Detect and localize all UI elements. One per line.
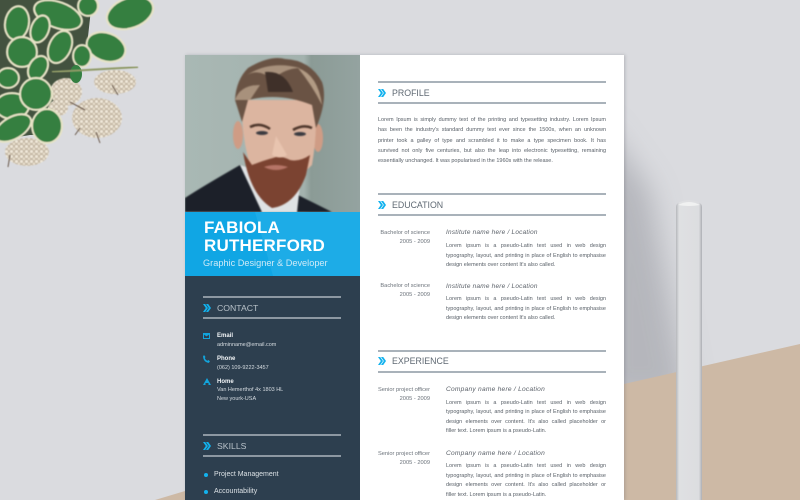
skill: project management: Project Management [214,471,279,478]
experience entry 2 title: Company name here / Location [446,450,545,457]
education top rule [378,193,606,195]
email label: Email [217,333,233,339]
profile text [378,117,606,164]
beard [243,152,310,208]
profile text: printer took a galley of type and scrambled it to make a type specimen book. It has [378,138,606,144]
experience top rule [378,350,606,352]
profile bottom rule [378,102,606,104]
experience entry 1 text: typography, layout, and printing in place of English to emphasise [446,409,606,415]
education entry 1 date: 2005 - 2009 [400,239,430,245]
profile text: survived not only five centuries, but also the leap into electronic typesetting, remaining [378,148,606,154]
phone label: Phone [217,356,235,362]
icon: email [203,333,210,339]
experience entry 2 date: 2005 - 2009 [400,460,430,466]
skills heading: SKILLS [217,441,246,451]
skill bullet [204,473,208,477]
skill: accountability: Accountability [214,488,257,495]
experience entry 2 text: typography, layout, and printing in place of English to emphasise [446,473,606,479]
education entry 2 date [380,283,430,298]
skill bullet [204,490,208,494]
profile chevrons [378,89,386,97]
experience entry 2 text: filler text. Lorem ipsum is a pseudo-Latin. [446,492,546,498]
face [242,100,316,190]
education entry 1 text: design elements over content It's also called. [446,262,555,268]
experience chevrons [378,357,386,365]
education bottom rule [378,214,606,216]
home label: Home [217,379,234,385]
experience entry 2 text [446,463,606,498]
education entry 1 date [380,230,430,245]
home address [217,387,283,402]
sidebar panel [185,276,360,500]
name: RUTHERFORD [204,236,325,255]
leaves [0,0,158,148]
experience entry 1 text: design elements over content. It's also called placeholder or [446,419,606,425]
experience entry 2 date: Senior project officer [378,451,430,457]
experience heading: EXPERIENCE [392,356,449,366]
portrait photo [185,55,360,212]
experience bottom rule [378,371,606,373]
profile text: Lorem Ipsum is simply dummy text of the printing and typesetting industry. Lorem Ipsum [378,117,606,123]
experience entry 1 date: 2005 - 2009 [400,396,430,402]
profile text: has been the industry's standard dummy text ever since the 1500s, when an unknown [378,127,606,133]
name banner [185,212,360,276]
education entry 1 title: Institute name here / Location [446,229,538,236]
diagonal accent [255,212,360,276]
experience entry 2 text: Lorem ipsum is a pseudo-Latin text used in web design [446,463,606,469]
contact rule top [203,296,341,298]
experience entry 1 date [378,387,430,402]
experience entry 1 text [446,400,606,434]
skills rule bottom [203,455,341,457]
icon: phone [203,355,210,363]
contact rule bottom [203,317,341,319]
education entry 1 date: Bachelor of science [380,230,430,236]
glass rod [676,202,702,500]
name [204,218,325,255]
education entry 2 text: typography, layout, and printing in place of English to emphasise [446,306,606,312]
profile heading: PROFILE [392,88,430,98]
contact heading: CONTACT [217,303,258,313]
contact chevrons [203,304,211,312]
education entry 2 text: design elements over content It's also called. [446,315,555,321]
education chevrons [378,201,386,209]
hair [235,58,324,128]
education entry 2 date: 2005 - 2009 [400,292,430,298]
education entry 2 text: Lorem ipsum is a pseudo-Latin text used in web design [446,296,606,302]
foliage backdrop [0,0,92,140]
education entry 2 text [446,296,606,321]
eyes [250,125,312,130]
experience entry 1 text: Lorem ipsum is a pseudo-Latin text used in web design [446,400,606,406]
education heading: EDUCATION [392,200,443,210]
home address: New yourk-USA [217,396,256,402]
education entry 1 text: typography, layout, and printing in place of English to emphasise [446,253,606,259]
skills rule top [203,434,341,436]
phone value: (062) 109-9222-3457 [217,365,269,371]
flower clusters [5,70,136,166]
job title: Graphic Designer & Developer [203,258,328,268]
experience entry 2 text: design elements over content. It's also called placeholder or [446,482,606,488]
experience entry 2 date [378,451,430,466]
ears [233,121,243,149]
experience entry 1 text: filler text. Lorem ipsum is a pseudo-Latin. [446,428,546,434]
skills chevrons [203,442,211,450]
education entry 1 text: Lorem ipsum is a pseudo-Latin text used in web design [446,243,606,249]
icon: home [203,378,211,385]
resume page [185,55,624,500]
experience entry 1 date: Senior project officer [378,387,430,393]
name: FABIOLA [204,218,280,237]
plant decoration [0,0,154,168]
education entry 2 title: Institute name here / Location [446,283,538,290]
jacket [185,165,332,212]
shirt [240,165,300,212]
email value: adminname@email.com [217,342,276,348]
profile text: essentially unchanged. It was popularised in the 1960s with the release. [378,158,553,164]
home address: Van Hemerthof 4x 1803 HL [217,387,283,393]
education entry 1 text [446,243,606,268]
education entry 2 date: Bachelor of science [380,283,430,289]
profile top rule [378,81,606,83]
background: wall and sand surface [155,136,800,500]
experience entry 1 title: Company name here / Location [446,386,545,393]
